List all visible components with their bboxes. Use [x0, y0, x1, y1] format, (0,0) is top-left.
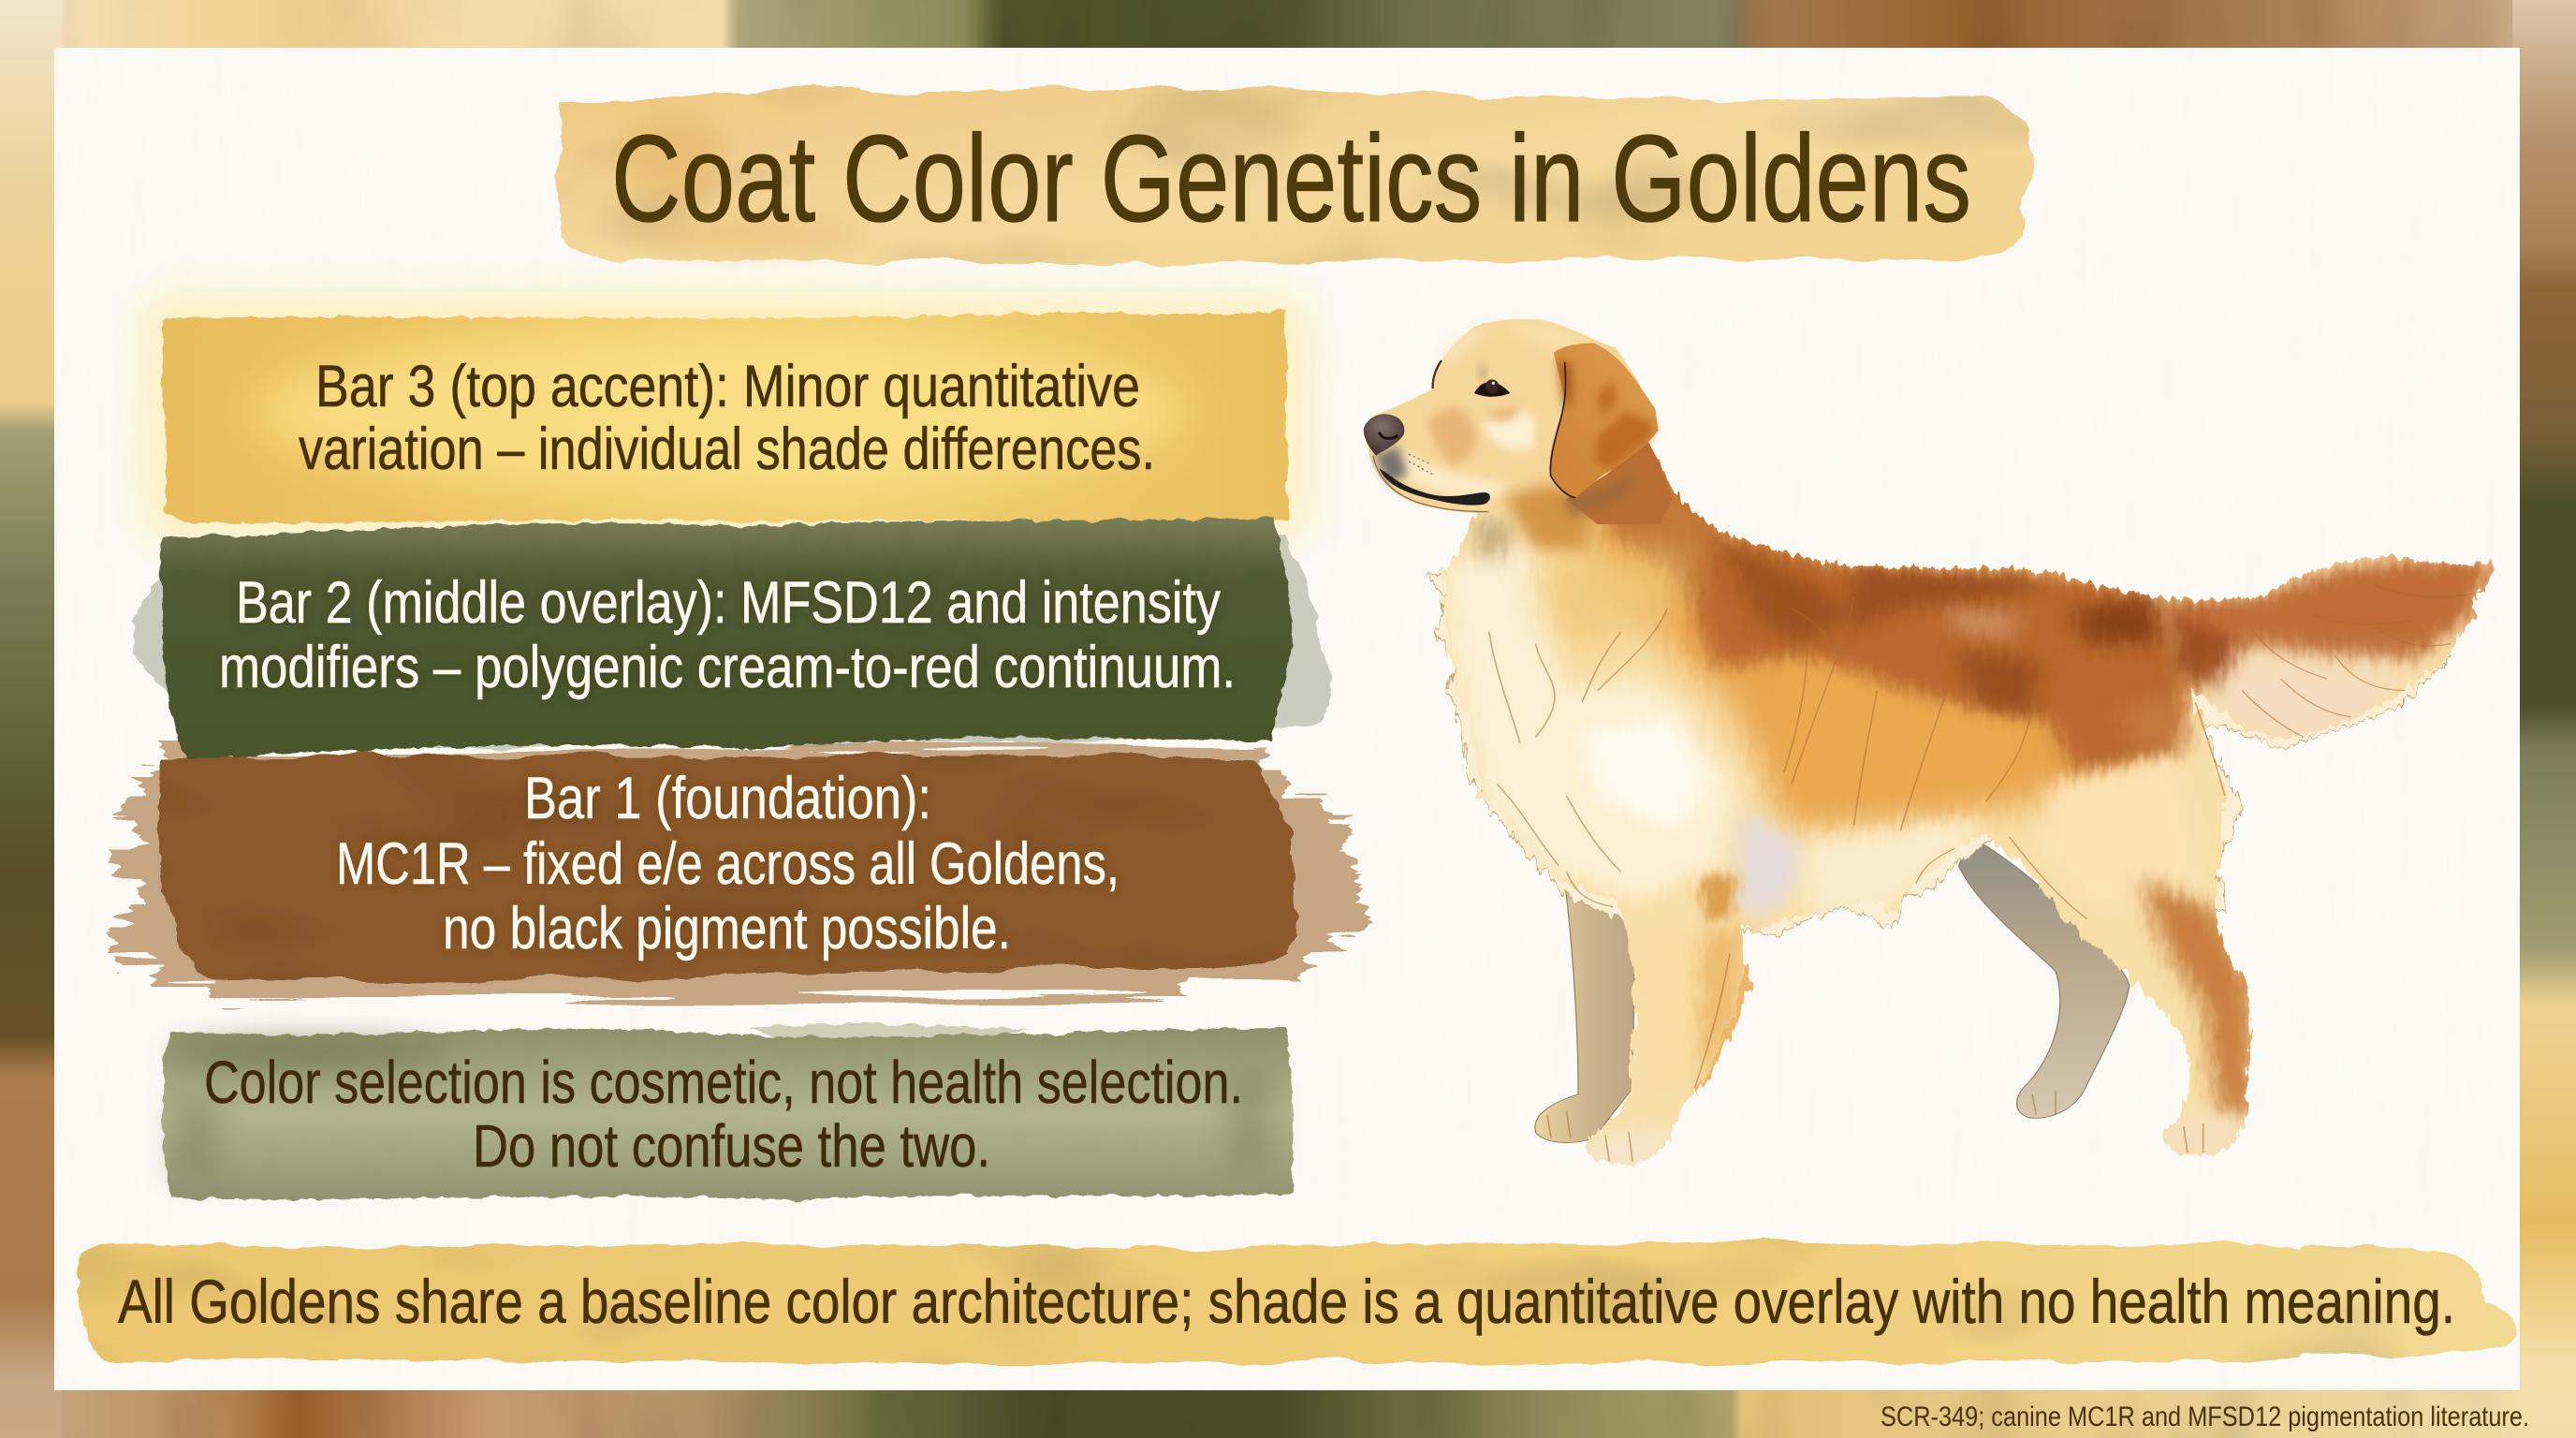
muzzle shadow: [1374, 447, 1407, 484]
belly shade: [1737, 807, 1799, 925]
brow crease: [1433, 360, 1442, 389]
bar 2 text: Bar 2 (middle overlay): MFSD12 and intensity: [236, 570, 1221, 636]
callout text: [204, 1049, 1243, 1180]
fur strokes: [1489, 585, 2482, 1162]
bar 1 text: [336, 766, 1120, 961]
illustration: golden retriever: [1364, 319, 2495, 1170]
bottom takeaway banner: [79, 1241, 2515, 1365]
front leg: [1699, 872, 1737, 925]
panel: bar 2 middle overlay: [133, 517, 1332, 758]
bar 1 text: MC1R – fixed e/e across all Goldens,: [336, 831, 1120, 897]
far front leg: [1535, 866, 1635, 1143]
title text: Coat Color Genetics in Goldens: [611, 110, 1971, 247]
whiskers: [1409, 454, 1432, 475]
nose: [1364, 414, 1404, 456]
chest and ruff: [1442, 538, 1737, 901]
glow behind bar 3: [140, 292, 1310, 545]
body with coat washes: [1425, 459, 2495, 1167]
bar 3 text: [299, 354, 1155, 482]
panel: bar 3 top accent: [163, 309, 1289, 523]
coat colour washes: [1442, 445, 2495, 1170]
ear: [1550, 344, 1659, 498]
panel: bar 1 foundation: [112, 749, 1362, 998]
bar 3 text: Bar 3 (top accent): Minor quantitative: [315, 354, 1140, 419]
bar 1 text: no black pigment possible.: [443, 896, 1011, 961]
eye: [1474, 365, 1510, 397]
bar 3 text: variation – individual shade differences.: [299, 417, 1155, 482]
tail: [2157, 560, 2495, 691]
tufts of fringe fur: [1427, 573, 2452, 936]
callout text: Color selection is cosmetic, not health selection.: [204, 1049, 1243, 1116]
dog head: [1364, 319, 1673, 550]
far hind leg: [1958, 837, 2130, 1118]
mouth: [1379, 468, 1490, 506]
callout text: Do not confuse the two.: [473, 1112, 990, 1180]
hind leg: [2033, 746, 2178, 890]
callout: cosmetic not health: [162, 1024, 1294, 1200]
bar 1 text: Bar 1 (foundation):: [524, 766, 931, 831]
title banner: [558, 86, 2033, 264]
neck below ear: [1566, 440, 1673, 524]
bar 2 text: [219, 570, 1236, 700]
bar 2 text: modifiers – polygenic cream-to-red continuum.: [219, 635, 1236, 700]
